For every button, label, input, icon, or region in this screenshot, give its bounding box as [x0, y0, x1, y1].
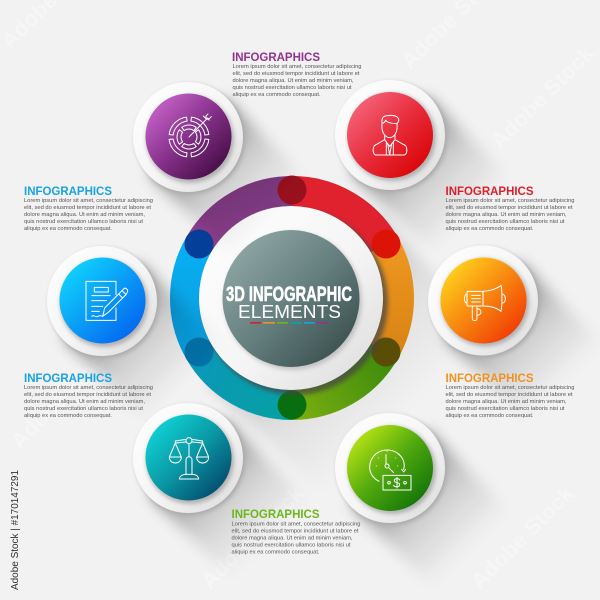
text block: orange: elit, sed do eiusmod tempor incididunt ut labore et: [446, 392, 573, 398]
colour bars: [250, 322, 328, 324]
text block: blue lower: Lorem ipsum dolor sit amet, consectetur adipiscing: [24, 385, 153, 391]
text block: blue lower: dolore magna aliqua. Ut enim ad minim veniam,: [24, 399, 145, 405]
centre title: [226, 283, 352, 322]
text block: blue upper: elit, sed do eiusmod tempor incididunt ut labore et: [24, 205, 151, 211]
text block: orange: aliquip ex ea commodo consequat.: [446, 413, 534, 419]
icon: document and pen: [86, 281, 128, 320]
watermark pattern: Adobe Stock: [196, 480, 309, 594]
text block: red: quis nostrud exercitation ullamco laboris nisi ut: [446, 219, 565, 225]
panel: colour ring: [189, 195, 395, 401]
panel: teal scales: [133, 403, 308, 578]
text block: green: elit, sed do eiusmod tempor incididunt ut labore et: [232, 528, 359, 534]
heading: INFOGRAPHICS: [446, 373, 534, 385]
text block: green: Lorem ipsum dolor sit amet, consectetur adipiscing: [232, 522, 360, 528]
text block: blue upper: [24, 186, 153, 232]
text block: orange: dolore magna aliqua. Ut enim ad minim veniam,: [446, 399, 567, 405]
text block: blue upper: dolore magna aliqua. Ut enim ad minim veniam,: [24, 212, 145, 218]
text block: red: dolore magna aliqua. Ut enim ad minim veniam,: [446, 212, 567, 218]
watermark pattern: Adobe Stock: [486, 40, 599, 154]
text block: purple: [232, 52, 362, 98]
icon: balance scales: [169, 438, 209, 479]
icon: target with arrow: [169, 114, 211, 157]
text block: red: [446, 186, 574, 232]
panel: red person: [335, 80, 510, 255]
panel: centre disc: [199, 206, 388, 395]
ring segment: orange: [381, 246, 395, 350]
text block: green: dolore magna aliqua. Ut enim ad minim veniam,: [232, 536, 353, 542]
text block: blue lower: aliquip ex ea commodo consequat.: [24, 413, 112, 419]
text block: purple: Lorem ipsum dolor sit amet, consectetur adipiscing: [232, 64, 362, 70]
text block: purple: dolore magna aliqua. Ut enim ad minim veniam,: [232, 78, 354, 84]
icon: businessman: [373, 115, 407, 155]
text block: purple: quis nostrud exercitation ullamco laboris nisi ut: [232, 85, 352, 91]
text block: blue upper: quis nostrud exercitation ullamco laboris nisi ut: [24, 219, 143, 225]
text block: green: aliquip ex ea commodo consequat.: [232, 550, 320, 556]
panel: orange megaphone: [428, 246, 600, 420]
centre title: 3D INFOGRAPHIC: [226, 283, 352, 306]
panel: blue document: [47, 246, 222, 421]
icon: megaphone: [464, 285, 505, 321]
large centre shadow: [209, 215, 492, 498]
ring segment: teal: [203, 350, 292, 401]
icon: clock and banknote: [370, 450, 411, 490]
text block: orange: quis nostrud exercitation ullamco laboris nisi ut: [446, 406, 565, 412]
ring segment: red: [292, 195, 381, 246]
heading: INFOGRAPHICS: [446, 186, 534, 198]
text block: red: elit, sed do eiusmod tempor incididunt ut labore et: [446, 205, 573, 211]
text block: green: quis nostrud exercitation ullamco laboris nisi ut: [232, 542, 351, 548]
watermark pattern: Adobe Stock: [6, 340, 119, 454]
panel: purple target: [133, 82, 308, 257]
text block: orange: Lorem ipsum dolor sit amet, consectetur adipiscing: [446, 385, 574, 391]
ring joint dots: [184, 176, 400, 420]
ring segment: purple: [203, 195, 292, 246]
stock image id: Adobe Stock | #170147291: [9, 470, 21, 590]
heading: INFOGRAPHICS: [24, 186, 112, 198]
text block: red: Lorem ipsum dolor sit amet, consectetur adipiscing: [446, 198, 574, 204]
text block: purple: aliquip ex ea commodo consequat.: [232, 92, 321, 98]
heading: INFOGRAPHICS: [232, 52, 320, 64]
centre title: ELEMENTS: [238, 301, 341, 322]
text block: red: aliquip ex ea commodo consequat.: [446, 226, 534, 232]
watermark pattern: Adobe Stock: [466, 480, 579, 594]
ring segment: blue: [189, 246, 203, 350]
text block: blue lower: [24, 373, 153, 419]
text block: green: [232, 509, 360, 556]
ring segment: green: [292, 350, 381, 401]
text block: orange: [446, 373, 574, 419]
text block: purple: elit, sed do eiusmod tempor incididunt ut labore et: [232, 71, 360, 77]
heading: INFOGRAPHICS: [24, 373, 112, 385]
text block: blue upper: aliquip ex ea commodo consequat.: [24, 226, 112, 232]
heading: INFOGRAPHICS: [232, 509, 320, 521]
panel: green clock and money: [335, 413, 510, 588]
text block: blue lower: quis nostrud exercitation ullamco laboris nisi ut: [24, 406, 143, 412]
text block: blue upper: Lorem ipsum dolor sit amet, consectetur adipiscing: [24, 198, 153, 204]
text block: blue lower: elit, sed do eiusmod tempor incididunt ut labore et: [24, 392, 151, 398]
